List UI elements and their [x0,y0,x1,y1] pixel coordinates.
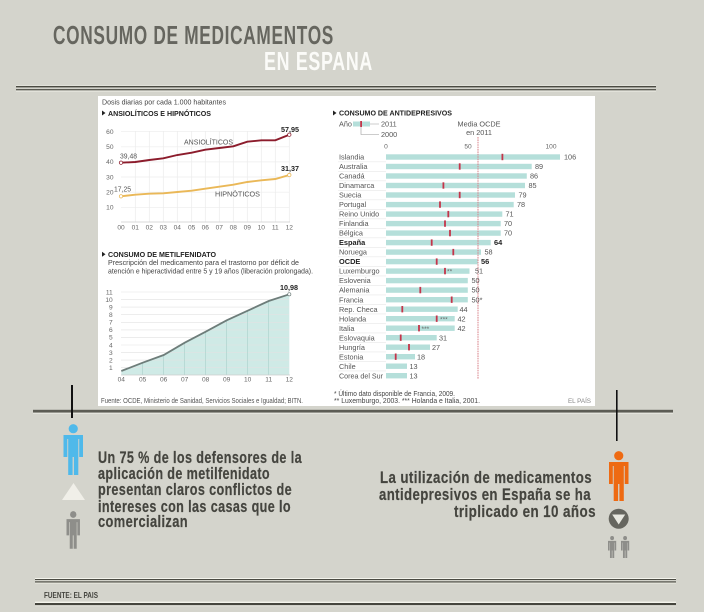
panel: ansiolíticos e hipnóticos: 00 [117,225,125,232]
bar values: 50 [472,286,480,295]
country labels: Chile [339,362,356,371]
panel: consumo de metilfenidato: 9 [109,304,113,311]
panel: consumo de metilfenidato: 8 [109,312,113,319]
bar values: 18 [417,352,425,361]
panel: consumo de metilfenidato [101,250,313,405]
bar values [410,153,576,380]
country labels: Portugal [339,200,367,209]
panel: ansiolíticos e hipnóticos: 30 [106,174,114,181]
country labels: Eslovenia [339,276,372,285]
panel: white chart panel [98,96,595,406]
footnotes: ** Luxemburgo, 2003. *** Holanda e Italia, 2001. [334,398,480,405]
country labels [339,153,384,380]
panel: consumo de metilfenidato: 4 [109,342,113,349]
panel: consumo de antidepresivos: 0 [384,143,388,150]
panel: consumo de antidepresivos: Media OCDE [458,120,501,128]
bar values: 70 [504,219,512,228]
panel: consumo de antidepresivos: en 2011 [466,128,492,137]
bar values: 58 [484,248,493,257]
bar values: 50 [472,276,480,285]
legend: 2000 [381,130,397,139]
panel: ansiolíticos e hipnóticos: 10 [258,225,265,232]
panel: ansiolíticos e hipnóticos: 12 [286,225,293,232]
panel: ansiolíticos e hipnóticos: 31,37 [281,164,299,173]
panel: consumo de metilfenidato: 09 [223,377,231,384]
panel: consumo de antidepresivos: CONSUMO DE ANTIDEPRESIVOS [339,108,452,118]
country labels: Bélgica [339,229,364,238]
icon: two gray persons [608,536,629,558]
text block: antidepresivos claim [379,469,596,521]
legend: Año [339,120,352,128]
panel: consumo de metilfenidato: 08 [202,377,210,384]
panel: ansiolíticos e hipnóticos: 05 [188,225,196,232]
bar values: ** [447,269,453,276]
text block: metilfenidato claim: Un 75 % de los defensores de la [98,449,302,467]
country labels: Dinamarca [339,181,375,190]
panel: ansiolíticos e hipnóticos: 03 [160,225,167,232]
panel: consumo de metilfenidato: 07 [181,377,189,384]
panel: consumo de antidepresivos: 50 [464,143,472,150]
country labels: Francia [339,295,364,304]
bar values: 86 [530,172,538,181]
text block: metilfenidato claim: aplicación de metilfenidato [98,465,270,483]
panel: consumo de metilfenidato: 5 [109,335,113,342]
source note: FUENTE: EL PAIS [44,590,98,600]
text block: metilfenidato claim: intereses con las casas que lo [98,498,291,516]
country labels: Islandia [339,153,365,162]
bar values: 13 [410,371,418,380]
country labels: Hungría [339,343,366,352]
panel: ansiolíticos e hipnóticos: ANSIOLÍTICOS E HIPNÓTICOS [108,109,211,118]
legend [339,120,397,139]
country labels: Finlandia [339,219,370,228]
bar values: *** [440,316,448,323]
panel: ansiolíticos e hipnóticos: 20 [106,190,114,196]
line: ansiolíticos [119,133,291,164]
country labels: España [339,238,366,247]
country labels: Suecia [339,191,362,200]
panel: ansiolíticos e hipnóticos: HIPNÓTICOS [215,190,260,199]
bar values: 50* [472,295,483,304]
panel: consumo de metilfenidato: 10 [105,297,113,304]
bar values: 89 [535,162,543,171]
panel: ansiolíticos e hipnóticos [102,97,299,232]
panel: consumo de metilfenidato: 10 [244,377,252,384]
panel: ansiolíticos e hipnóticos: 01 [132,225,139,232]
panel: consumo de antidepresivos: 100 [545,143,557,150]
panel: ansiolíticos e hipnóticos: 11 [272,225,279,232]
country labels: Corea del Sur [339,371,384,380]
connector: left vertical line [71,385,73,418]
text block: antidepresivos claim: La utilización de medicamentos [380,469,592,487]
text block: antidepresivos claim: antidepresivos en España se ha [379,486,591,504]
country labels: Reino Unido [339,210,379,219]
line: metilfenidato [121,293,291,371]
icon: gray person [66,511,80,549]
bar values: 51 [475,267,483,276]
panel: consumo de metilfenidato: 06 [160,377,168,384]
panel: consumo de metilfenidato: atención e hiperactividad entre 5 y 19 años (liberación prolongada). [108,266,313,276]
bar values: 44 [460,305,468,314]
bar values: 70 [504,229,512,238]
panel: ansiolíticos e hipnóticos: 08 [230,225,237,232]
bar values: 27 [432,343,440,352]
panel: consumo de metilfenidato: 6 [109,327,113,334]
footnotes [334,389,591,405]
country labels: Luxemburgo [339,267,380,276]
footnotes: EL PAÍS [568,396,591,405]
icon: up triangle [62,483,85,500]
panel: ansiolíticos e hipnóticos: 40 [106,159,114,166]
panel: consumo de metilfenidato: 3 [109,350,113,357]
panel: ansiolíticos e hipnóticos: Dosis diarias por cada 1.000 habitantes [102,97,226,106]
country labels: Alemania [339,286,370,295]
title: CONSUMO DE MEDICAMENTOS [53,22,334,50]
bar values: 106 [564,153,576,162]
panel: consumo de metilfenidato: Fuente: OCDE, Ministerio de Sanidad, Servicios Sociales e Igualdad; BITN. [101,398,303,405]
panel: consumo de metilfenidato: 2 [109,357,113,364]
bars [386,154,560,378]
country labels: Estonia [339,352,364,361]
panel: consumo de metilfenidato: Prescripción del medicamento para el trastorno por déficit de [108,258,299,267]
panel: ansiolíticos e hipnóticos: 09 [244,225,251,232]
bar values: 13 [410,362,418,371]
text block: metilfenidato claim: comercializan [98,513,188,531]
line: hipnóticos [119,173,291,198]
panel: ansiolíticos e hipnóticos: 57,95 [281,125,299,134]
panel: consumo de metilfenidato: 11 [106,289,113,296]
icon: down triangle in circle [609,509,629,529]
panel: consumo de metilfenidato: 10,98 [280,283,298,292]
panel: ansiolíticos e hipnóticos: 02 [146,225,153,232]
panel: ansiolíticos e hipnóticos: 06 [202,225,209,232]
panel: ansiolíticos e hipnóticos: 17,25 [114,184,131,194]
title: EN ESPANA [264,48,373,76]
bar values: *** [422,326,430,333]
text block: metilfenidato claim [98,449,302,531]
panel: consumo de metilfenidato: 04 [118,377,125,384]
text block: antidepresivos claim: triplicado en 10 años [454,503,596,521]
panel: ansiolíticos e hipnóticos: 10 [106,205,114,212]
bar values: 31 [439,333,447,342]
panel: consumo de metilfenidato: CONSUMO DE METILFENIDATO [108,250,216,259]
bar values: 42 [458,314,466,323]
panel: consumo de metilfenidato: 1 [109,365,113,372]
panel: consumo de metilfenidato: 7 [109,320,113,327]
country labels: Canadá [339,172,366,181]
panel: consumo de metilfenidato: 11 [265,377,272,384]
country labels: Australia [339,162,368,171]
panel: ansiolíticos e hipnóticos: 07 [216,225,223,232]
text block: metilfenidato claim: presentan claros conflictos de [98,481,292,499]
bar values: 56 [481,257,489,266]
panel: ansiolíticos e hipnóticos: 04 [174,225,181,232]
year 2000 markers [395,154,503,360]
panel: consumo de metilfenidato: 05 [139,377,147,384]
icon: orange person [609,451,628,501]
panel: consumo de metilfenidato: 12 [286,377,293,384]
bar values: 42 [458,324,466,333]
bar values: 78 [517,200,525,209]
panel: ansiolíticos e hipnóticos: ANSIOLÍTICOS [184,138,233,147]
title [53,22,373,76]
bar values: 64 [494,238,503,247]
country labels: Eslovaquia [339,333,376,342]
country labels: OCDE [339,257,360,266]
connector: right vertical line [616,390,618,441]
country labels: Noruega [339,248,368,257]
footnotes: * Último dato disponible de Francia, 2009. [334,389,455,398]
panel: ansiolíticos e hipnóticos: 39,48 [120,152,137,160]
legend: 2011 [381,120,397,128]
bar values: 79 [518,191,527,200]
bar values: 71 [506,210,514,219]
country labels: Rep. Checa [339,305,378,314]
panel: consumo de antidepresivos [333,108,591,405]
panel: ansiolíticos e hipnóticos: 60 [106,129,114,136]
bar values: 85 [528,181,537,190]
country labels: Holanda [339,314,367,323]
panel: ansiolíticos e hipnóticos: 50 [106,144,114,151]
icon: blue person [64,424,83,475]
country labels: Italia [339,324,355,333]
